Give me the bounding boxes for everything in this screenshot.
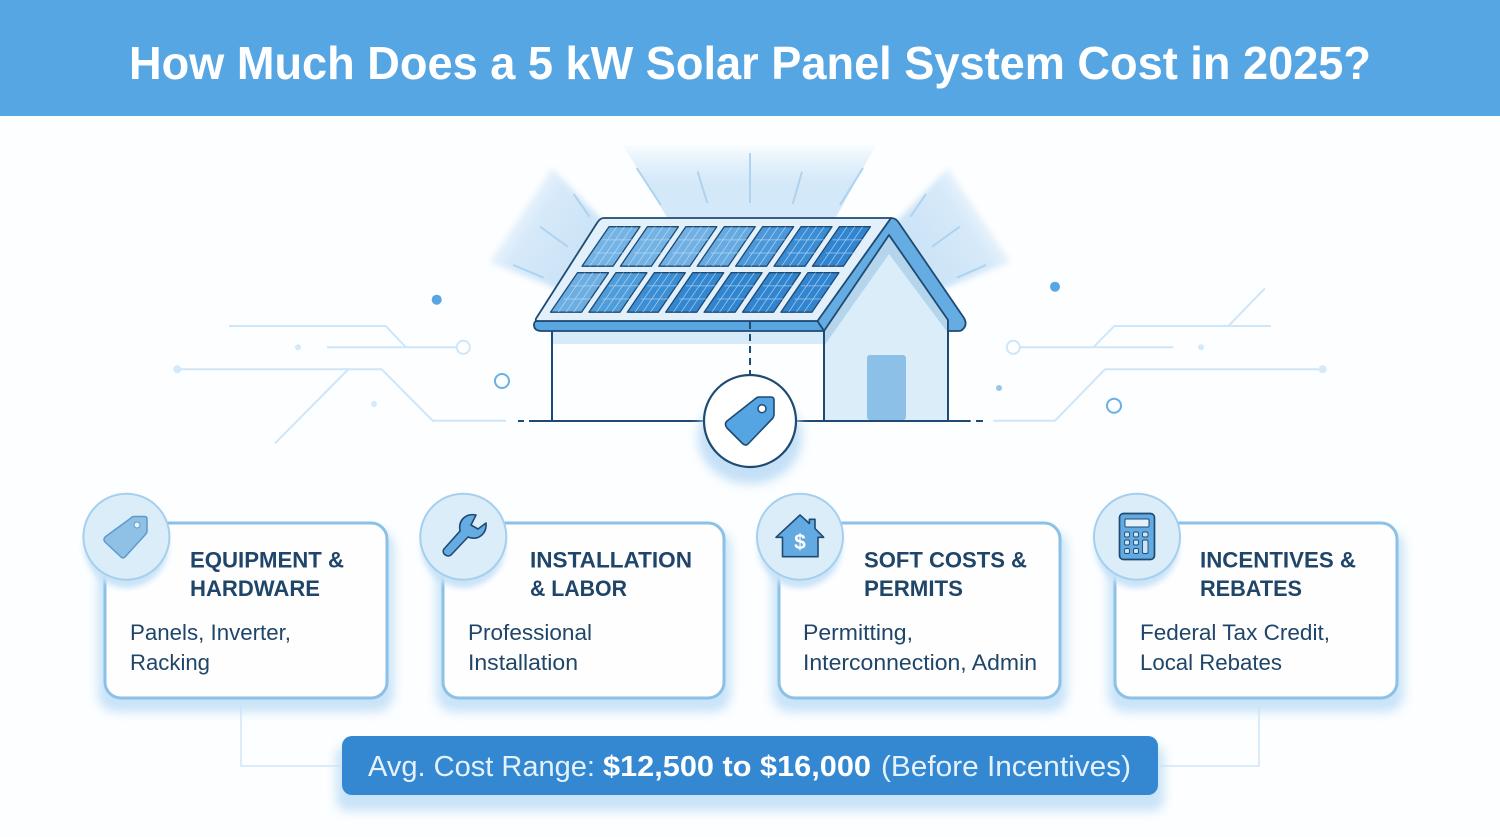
roof eave	[534, 321, 824, 331]
ground line	[518, 420, 983, 422]
card heading: HARDWARE	[190, 576, 320, 601]
price tag badge	[698, 375, 802, 484]
icon badge: house with dollar	[757, 494, 843, 580]
card text: Local Rebates	[1140, 650, 1282, 675]
card text: Federal Tax Credit,	[1140, 620, 1330, 645]
house with solar roof	[534, 218, 966, 421]
average cost summary bar: Avg. Cost Range:	[368, 751, 595, 783]
house gable wall	[824, 235, 948, 421]
average cost summary bar: $12,500 to $16,000	[603, 751, 871, 783]
card heading: INSTALLATION	[530, 548, 692, 572]
card text	[1140, 620, 1330, 675]
icon badge: wrench	[420, 494, 506, 580]
title banner	[0, 0, 1500, 116]
card text	[803, 620, 1037, 675]
summary connector lines	[241, 699, 1259, 766]
roof gable band	[817, 218, 966, 331]
card text: Professional	[468, 620, 592, 645]
right circuit decoration	[993, 282, 1327, 421]
card: equipment and hardware	[83, 494, 394, 712]
card heading	[530, 548, 692, 601]
icon badge: house with dollar: $	[794, 531, 806, 554]
card: soft costs and permits	[757, 494, 1067, 712]
card: incentives and rebates	[1094, 494, 1404, 712]
card text: Installation	[468, 650, 578, 675]
card: installation and labor	[420, 494, 731, 712]
card heading: PERMITS	[864, 576, 963, 601]
dashed connector from roof to price tag	[749, 322, 751, 375]
icon: price tag	[726, 397, 774, 445]
card heading: & LABOR	[530, 576, 627, 601]
card heading	[1200, 548, 1356, 601]
roof face	[536, 218, 891, 321]
card text: Interconnection, Admin	[803, 650, 1037, 675]
card heading: REBATES	[1200, 576, 1302, 601]
average cost summary bar: (Before Incentives)	[881, 751, 1131, 783]
card heading	[190, 548, 344, 601]
icon badge: tag	[83, 494, 169, 580]
icon badge: calculator	[1094, 494, 1180, 580]
card text: Panels, Inverter,	[130, 620, 291, 645]
card text: Permitting,	[803, 620, 913, 645]
sun rays	[490, 145, 1010, 290]
card heading: EQUIPMENT &	[190, 548, 344, 572]
card heading	[864, 548, 1027, 601]
card text	[468, 620, 592, 675]
left circuit decoration	[173, 295, 509, 443]
card heading: INCENTIVES &	[1200, 548, 1356, 572]
title: How Much Does a 5 kW Solar Panel System Cost in 2025?	[129, 37, 1371, 89]
card heading: SOFT COSTS &	[864, 548, 1027, 572]
card text: Racking	[130, 650, 210, 675]
solar panels	[550, 227, 870, 312]
average cost summary bar	[336, 736, 1164, 811]
door	[867, 355, 906, 420]
house front wall	[552, 331, 824, 421]
card text	[130, 620, 291, 675]
